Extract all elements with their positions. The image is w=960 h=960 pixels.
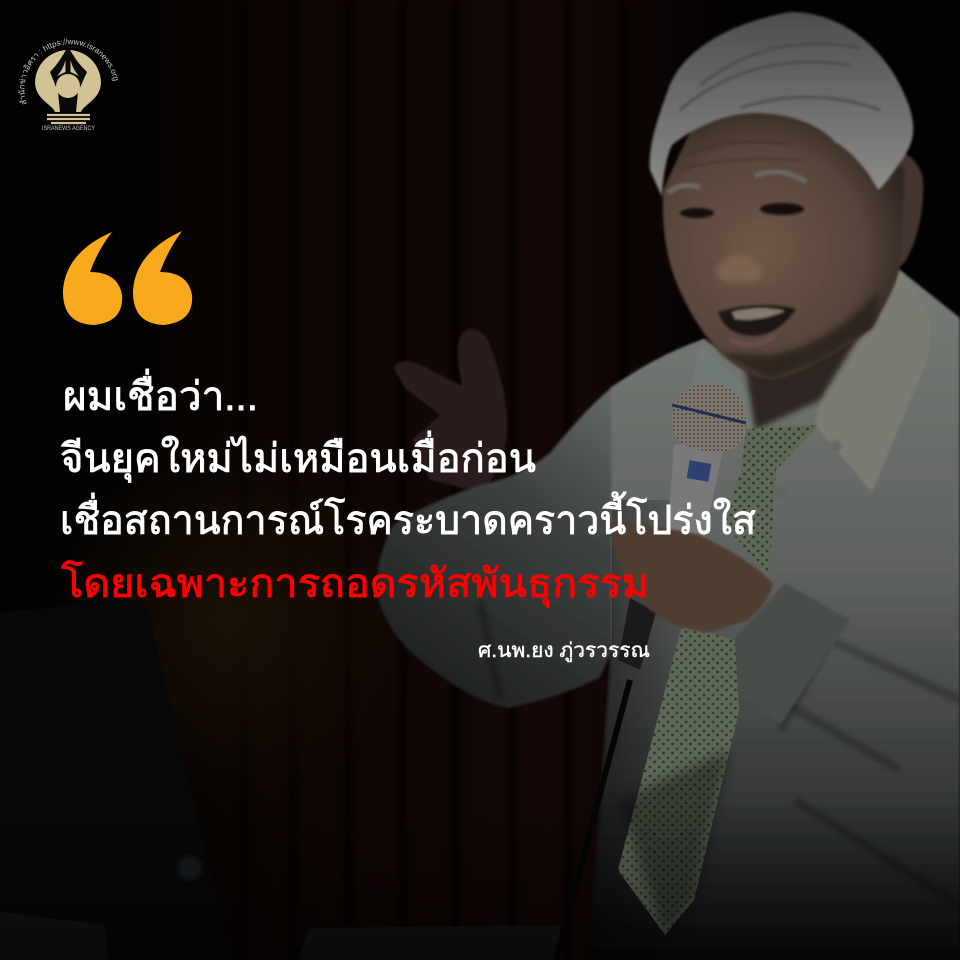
logo arc text: สำนักข่าวอิศรา : https://www.isranews.org <box>18 38 118 104</box>
quote line 4 highlighted: โดยเฉพาะการถอดรหัสพันธุกรรม <box>61 561 649 608</box>
dark monitor bottom left <box>0 600 560 960</box>
eyes <box>680 203 804 218</box>
left sleeve <box>377 339 705 708</box>
tie shade overlay <box>618 750 730 935</box>
raised left hand <box>394 329 507 492</box>
quote line 1: ผมเชื่อว่า... <box>63 369 258 419</box>
bottom fade <box>0 800 960 960</box>
hair strands <box>680 44 880 110</box>
right arm cuff <box>711 583 850 725</box>
attribution: ศ.นพ.ยง ภู่วรวรรณ <box>478 640 650 663</box>
sleeve fold shadows <box>480 600 960 905</box>
mouth <box>718 305 796 344</box>
face <box>663 110 905 380</box>
logo nib centre <box>57 60 79 76</box>
tie knot and upper blade <box>724 425 818 578</box>
jaw shadow <box>720 290 880 378</box>
neck <box>745 335 860 430</box>
nose <box>716 254 762 282</box>
logo base lines <box>47 115 90 123</box>
ear <box>880 150 923 280</box>
quote line 2: จีนยุคใหม่ไม่เหมือนเมื่อก่อน <box>60 431 536 483</box>
shirt side shade <box>590 500 700 960</box>
hand holding microphone <box>611 519 773 632</box>
logo bulb <box>35 50 101 112</box>
quote text <box>60 369 756 608</box>
tie lower blade <box>618 625 739 935</box>
forehead wrinkles <box>680 142 800 170</box>
shirt body <box>590 270 960 960</box>
microphone <box>618 383 746 670</box>
logo agency name: ISRANEWS AGENCY <box>42 125 96 132</box>
quote line 3: เชื่อสถานการณ์โรคระบาดคราวนี้โปร่งใส <box>60 491 756 543</box>
eyebrows <box>668 172 806 193</box>
hair <box>650 12 913 197</box>
shirt collar <box>690 268 931 500</box>
head <box>650 12 923 380</box>
opening quotation mark <box>63 231 192 325</box>
photo: speaker <box>377 12 960 960</box>
logo pen nib <box>50 46 87 112</box>
logo: Isranews Agency <box>18 38 118 132</box>
microphone cable <box>556 680 630 960</box>
